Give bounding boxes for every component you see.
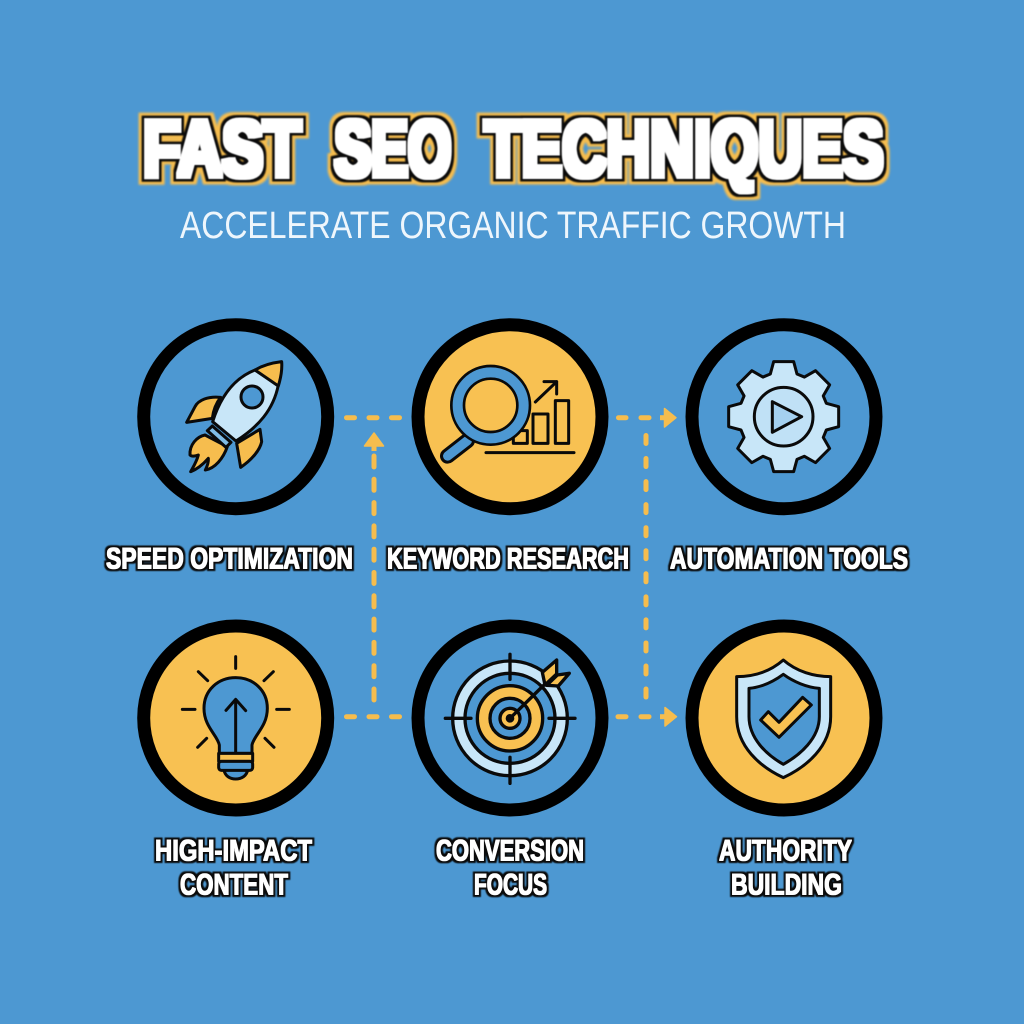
title [143,104,884,193]
icon: magnifier and chart [448,372,574,456]
label: conversion focus [436,834,584,902]
connector: keyword to automation arrow [618,408,676,427]
icon: light bulb [182,657,289,779]
icon: gear with play [729,362,839,472]
panel: authority building [692,626,876,810]
labels [106,542,908,902]
label: keyword research: KEYWORD RESEARCH [387,542,629,576]
panel: automation tools [692,325,876,509]
label: high-impact content [155,834,312,902]
label: automation tools: AUTOMATION TOOLS [670,542,908,576]
label: conversion focus: CONVERSION [436,834,584,868]
panel: conversion focus [418,626,602,810]
circle: authority [692,626,876,810]
label: high-impact content: HIGH-IMPACT [155,834,312,868]
circle: content [144,626,328,810]
title: FAST [143,104,301,193]
connector: conversion to authority arrow [618,708,676,726]
label: authority building [719,834,852,902]
label: authority building: BUILDING [731,868,842,902]
panel: speed optimization [144,325,328,509]
circle: conversion [418,626,602,810]
circle: keyword [418,325,602,509]
label: speed optimization: SPEED OPTIMIZATION [106,542,353,576]
icon: rocket [187,362,282,472]
label: conversion focus: FOCUS [474,868,547,902]
connector: conversion up to top row [364,433,384,700]
connector: bottom row left to conversion [346,714,404,719]
title: SEO [334,104,451,193]
connector: vertical link on right [644,436,648,700]
icon: target with arrow [445,654,575,783]
label: high-impact content: CONTENT [180,868,288,902]
circle: automation [692,325,876,509]
panel: keyword research [418,325,602,509]
icon: shield with check [737,660,831,778]
subtitle: ACCELERATE ORGANIC TRAFFIC GROWTH [180,205,846,247]
panel: high-impact content [144,626,328,810]
connector: top row left to keyword [346,415,404,420]
label: authority building: AUTHORITY [719,834,852,868]
circle: speed [144,325,328,509]
title: TECHNIQUES [484,104,884,193]
